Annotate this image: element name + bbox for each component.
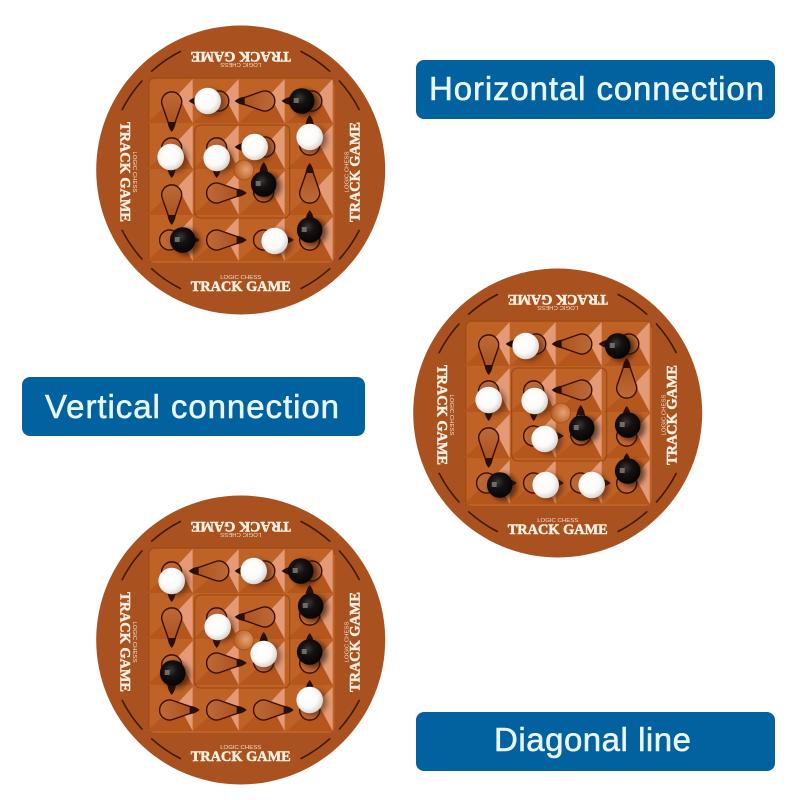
board base with tracks <box>96 496 385 784</box>
label: vertical connection: Vertical connection <box>45 388 339 425</box>
printed titles: TRACK GAME <box>348 592 364 692</box>
printed titles: TRACK GAME <box>348 122 364 222</box>
printed titles: LOGIC CHESS <box>220 531 261 537</box>
label: vertical connection <box>22 377 365 436</box>
printed titles: LOGIC CHESS <box>345 621 351 662</box>
label: horizontal connection: Horizontal connection <box>429 70 764 107</box>
game pieces <box>475 333 645 500</box>
board: horizontal connection <box>96 26 385 314</box>
printed titles: LOGIC CHESS <box>537 518 579 524</box>
printed titles <box>117 518 364 765</box>
label: diagonal line <box>416 712 775 771</box>
printed titles: TRACK GAME <box>191 749 291 765</box>
printed titles: LOGIC CHESS <box>448 394 454 436</box>
printed titles: TRACK GAME <box>508 291 608 307</box>
printed titles: TRACK GAME <box>665 365 681 465</box>
board base with tracks <box>96 26 385 314</box>
game pieces <box>158 558 328 716</box>
printed titles: TRACK GAME <box>191 518 291 534</box>
printed titles: LOGIC CHESS <box>537 304 578 310</box>
printed titles: LOGIC CHESS <box>220 61 261 67</box>
printed titles: LOGIC CHESS <box>220 275 262 281</box>
printed titles: TRACK GAME <box>117 122 133 222</box>
board base with tracks <box>413 268 702 558</box>
printed titles: LOGIC CHESS <box>131 622 137 663</box>
printed titles: TRACK GAME <box>191 279 291 295</box>
board: vertical connection <box>413 268 702 558</box>
label: horizontal connection <box>416 60 775 119</box>
printed titles <box>117 48 364 295</box>
label: diagonal line: Diagonal line <box>494 721 691 758</box>
printed titles: TRACK GAME <box>191 48 291 64</box>
printed titles: TRACK GAME <box>117 592 133 692</box>
board: diagonal line <box>96 496 385 784</box>
printed titles: TRACK GAME <box>434 365 450 465</box>
printed titles: LOGIC CHESS <box>131 152 137 193</box>
printed titles: LOGIC CHESS <box>220 745 262 751</box>
printed titles: LOGIC CHESS <box>345 151 351 192</box>
printed titles: TRACK GAME <box>508 522 608 538</box>
printed titles: LOGIC CHESS <box>662 394 668 436</box>
game pieces <box>157 88 327 256</box>
printed titles <box>434 291 681 538</box>
